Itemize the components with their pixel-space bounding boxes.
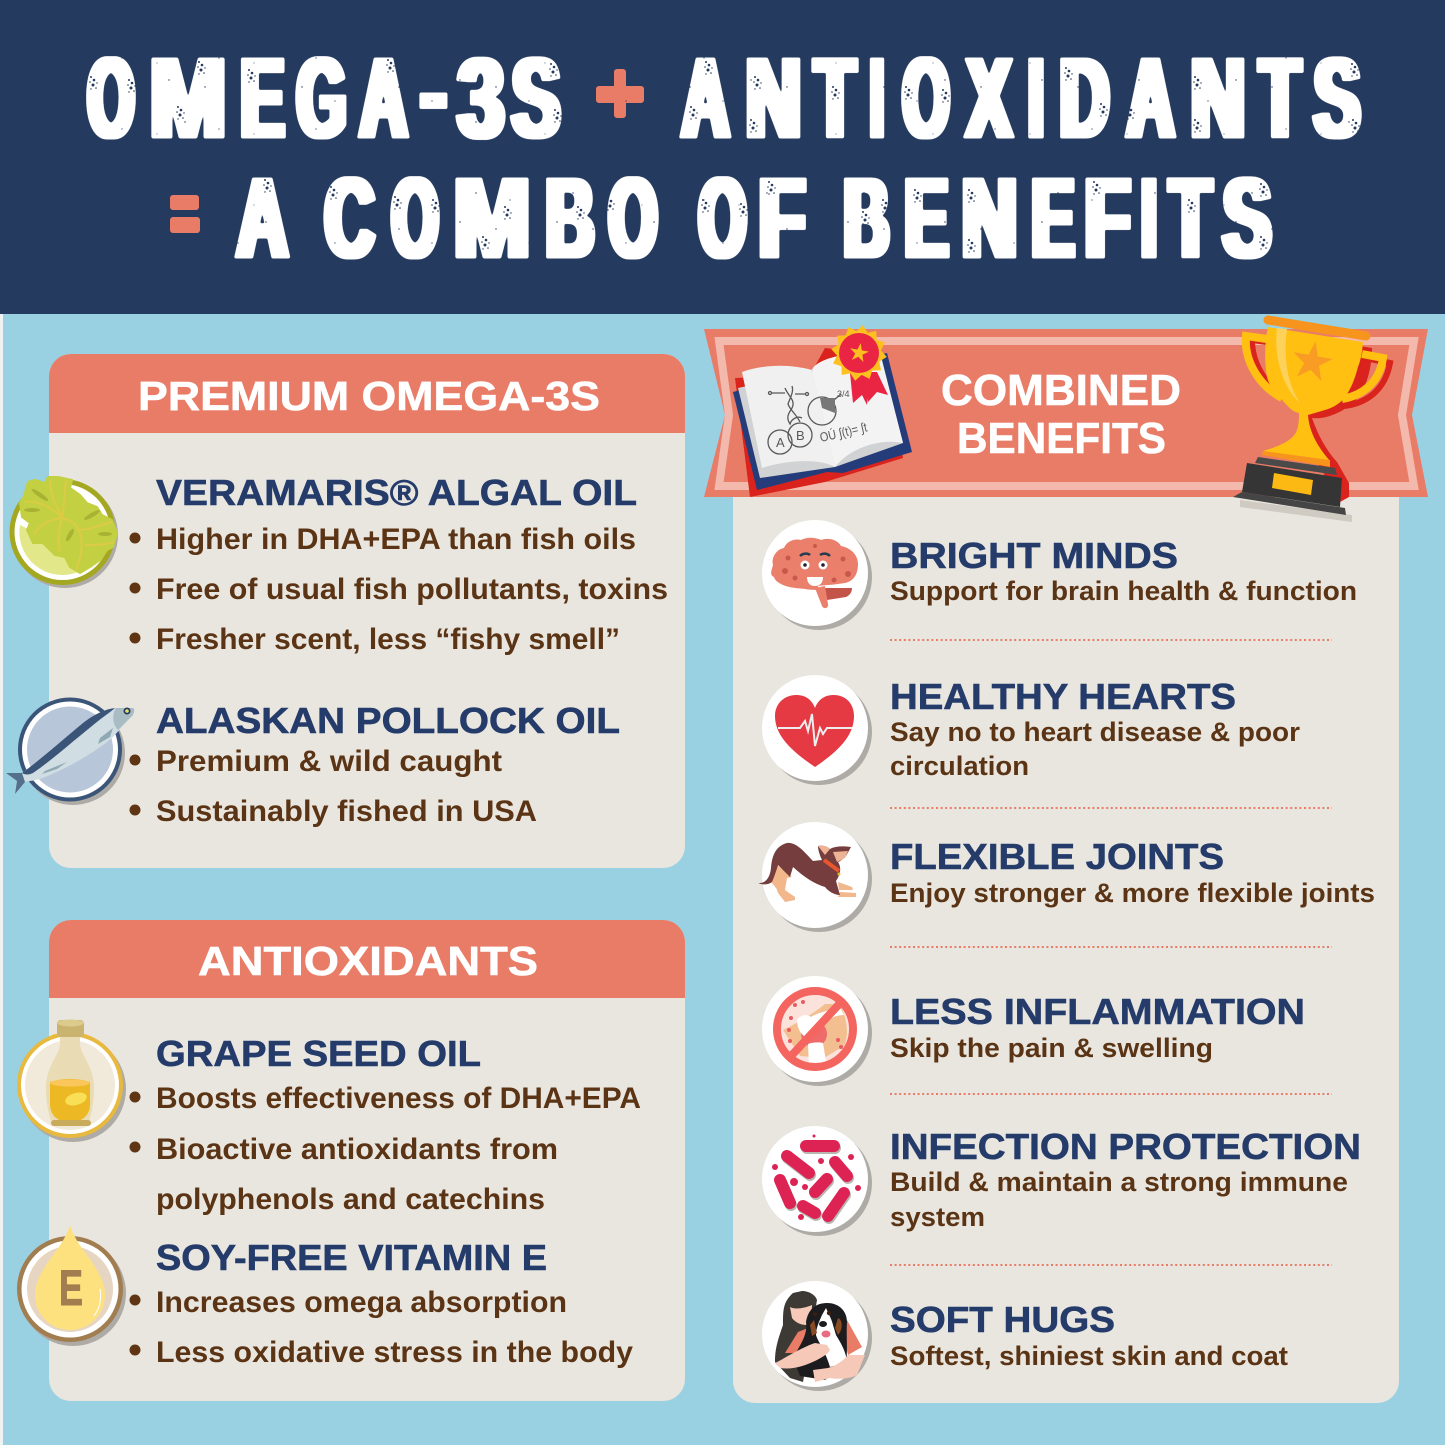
benefit: infection protection: Build & maintain a strong immune [890,1167,1348,1197]
title line 2: F [1085,155,1130,281]
title line 2: T [1170,155,1211,281]
title line 2: N [962,155,1017,281]
header banner [0,0,1445,314]
benefit: less inflammation: Skip the pain & swelling [890,1033,1213,1063]
title line 1: A [360,35,407,161]
title line 1: 3 [458,35,504,161]
banner heading: BENEFITS [957,414,1166,463]
section header: ANTIOXIDANTS [198,938,538,984]
benefit: healthy hearts: Say no to heart disease & poor [890,717,1301,747]
title line 1: A [1127,35,1174,161]
icon: open book with medal: B [796,428,805,443]
title line 1: N [746,35,801,161]
benefit: bright minds [890,535,1357,606]
panel: premium omega-3s [49,354,685,868]
icon: open book with medal: OÚ ∫(t)= ∫t [818,419,869,445]
section header [49,920,685,998]
icon: fish [6,698,134,805]
icon: stretching dog [758,822,872,932]
icon: brain [762,520,872,630]
item: alaskan pollock oil: Premium & wild caught [156,745,502,778]
icon: oil bottle [17,1020,126,1142]
ribbon banner [704,329,1428,497]
benefit: infection protection: INFECTION PROTECTION [890,1126,1361,1167]
title line 1: E [241,35,284,161]
benefit: flexible joints: FLEXIBLE JOINTS [890,836,1224,877]
title line 2: O [609,155,657,281]
item: grape seed oil: Boosts effectiveness of DHA+EPA [156,1082,641,1115]
title line 1: I [871,35,883,161]
title line 1: M [150,35,226,161]
title line 2: A [237,155,286,281]
icon: vitamin e drop: E [59,1260,83,1316]
title line 2: O [699,155,746,281]
icon: woman hugging dog [762,1281,872,1391]
benefit: soft hugs: SOFT HUGS [890,1299,1115,1340]
title line 2: C [325,155,374,281]
title line 1: N [1191,35,1245,161]
item: alaskan pollock oil: Sustainably fished in USA [156,795,537,828]
item: soy-free vitamin e: SOY-FREE VITAMIN E [156,1237,547,1278]
item: soy-free vitamin e: Increases omega absorption [156,1286,567,1319]
title line 1: I [1029,35,1043,161]
title line 2: O [392,155,438,281]
title line 2: B [844,155,889,281]
title line 2: F [759,155,805,281]
panel: antioxidants [49,920,685,1401]
title line 1: O [88,35,134,161]
equals sign [170,195,200,233]
icon: open book with medal [733,321,912,497]
benefit: flexible joints [890,836,1375,908]
benefit: soft hugs: Softest, shiniest skin and coat [890,1341,1288,1371]
section header: PREMIUM OMEGA-3S [138,373,600,419]
benefit: flexible joints: Enjoy stronger & more flexible joints [890,878,1375,908]
title line 1: X [967,35,1011,161]
title line 2: I [1142,155,1156,281]
item: grape seed oil: polyphenols and catechins [156,1183,545,1216]
icon: open book with medal: 3/4 [837,389,850,399]
item: grape seed oil [130,1033,641,1216]
item: soy-free vitamin e [130,1237,633,1369]
plus sign [596,69,644,118]
banner heading [941,366,1181,463]
item: veramaris algal oil: Higher in DHA+EPA than fish oils [156,523,636,556]
item: grape seed oil: GRAPE SEED OIL [156,1033,481,1074]
icon: bacteria [762,1126,872,1236]
title line 1: S [512,35,560,161]
benefit: infection protection [890,1126,1361,1232]
item: veramaris algal oil: VERAMARIS® ALGAL OIL [156,472,637,513]
section header [49,354,685,433]
benefit: bright minds: Support for brain health & function [890,576,1357,606]
title line 2: E [1032,155,1074,281]
item: veramaris algal oil [130,472,668,656]
icon: open book with medal: A [776,435,785,450]
benefit: soft hugs [890,1299,1288,1371]
title line 1: T [1260,35,1300,161]
benefit: bright minds: BRIGHT MINDS [890,535,1178,576]
benefit: less inflammation [890,991,1305,1063]
title line 1: S [1314,35,1360,161]
benefit: less inflammation: LESS INFLAMMATION [890,991,1305,1032]
benefit: healthy hearts: HEALTHY HEARTS [890,676,1236,717]
title line 2: S [1223,155,1271,281]
item: soy-free vitamin e: Less oxidative stress in the body [156,1336,633,1369]
title line 2: E [905,155,948,281]
item: grape seed oil: Bioactive antioxidants from [156,1133,558,1166]
title line 2: B [546,155,594,281]
title line 1: G [297,35,346,161]
title line 1: - [421,28,446,154]
title line 2: M [454,155,530,281]
item: alaskan pollock oil [130,700,620,828]
benefit: healthy hearts: circulation [890,751,1029,781]
panel: combined benefits [733,495,1399,1403]
icon: algae [10,477,118,588]
item: veramaris algal oil: Fresher scent, less “fishy smell” [156,623,620,656]
icon: trophy [1233,320,1390,522]
item: alaskan pollock oil: ALASKAN POLLOCK OIL [156,700,620,741]
icon: heart [762,675,872,785]
title line 1: T [815,35,855,161]
title line 1: O [903,35,949,161]
icon: no inflammation [762,976,872,1086]
benefit: healthy hearts [890,676,1301,781]
title line 1: D [1060,35,1109,161]
title line 1: A [682,35,729,161]
benefit: infection protection: system [890,1202,985,1232]
icon: vitamin e drop [17,1225,126,1346]
banner heading: COMBINED [941,366,1181,415]
item: veramaris algal oil: Free of usual fish pollutants, toxins [156,573,668,606]
